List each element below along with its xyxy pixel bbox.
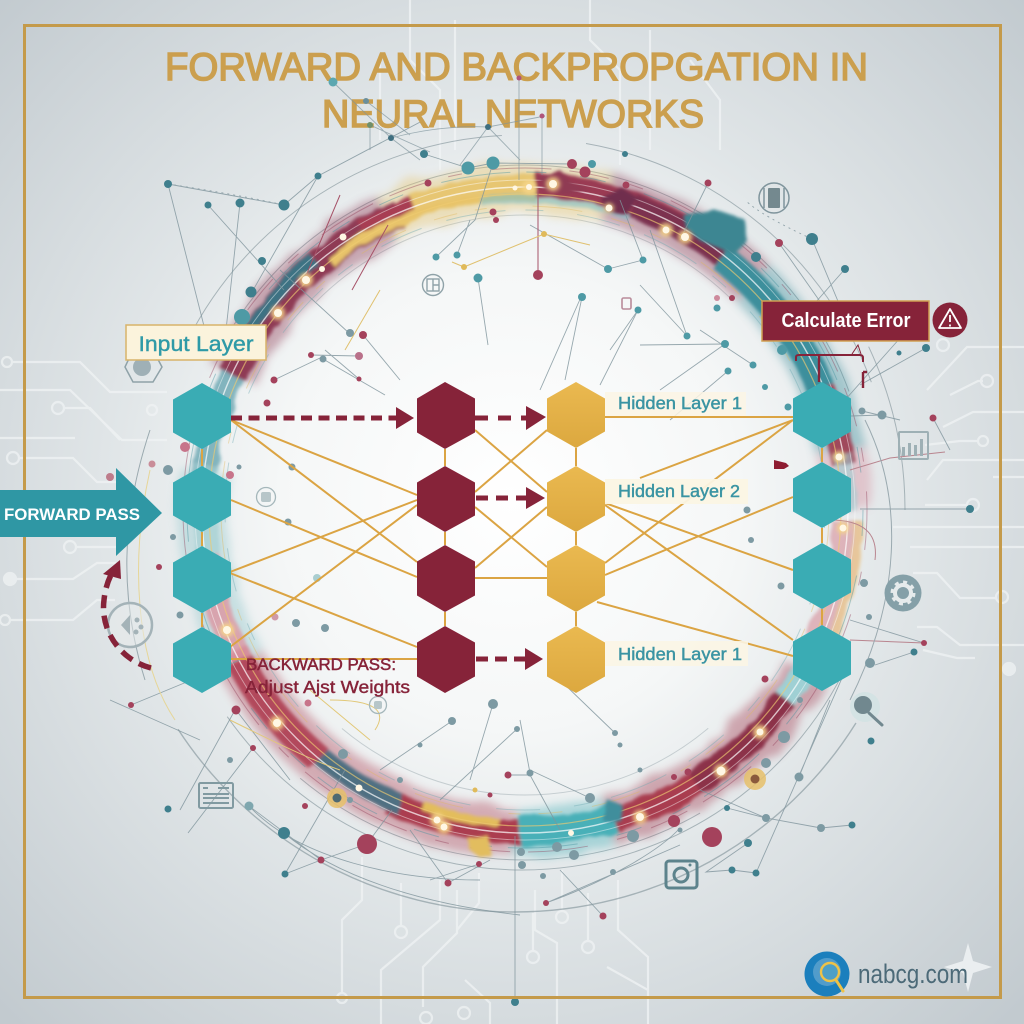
backward pass label (245, 655, 410, 697)
scattered network nodes (106, 150, 974, 1006)
title (165, 46, 868, 136)
dashed arrow: input to hidden top (231, 407, 414, 429)
calculate error label (762, 301, 929, 341)
coloured thin lines (127, 190, 945, 770)
input layer label: Input Layer (138, 333, 254, 356)
ring feather haze (203, 188, 847, 832)
title: NEURAL NETWORKS (322, 93, 704, 136)
label: hidden layer 1 lower (605, 641, 748, 666)
dashed arrow: maroon to gold row 1 (475, 406, 546, 430)
label: hidden layer 2 (605, 479, 748, 504)
outer thin orbit arcs (113, 108, 917, 912)
logo: nabcg.com: nabcg.com (858, 959, 968, 989)
input layer label (126, 325, 266, 360)
title overlay network (328, 76, 545, 180)
icon: small pink square (622, 298, 631, 309)
ring highlights (195, 180, 855, 840)
ring splashes (468, 170, 747, 858)
title: FORWARD AND BACKPROPGATION IN (165, 46, 868, 89)
dashed arrow: maroon to gold row 2 (476, 487, 545, 509)
dashed arrow: maroon to gold row 4 (476, 648, 543, 670)
label: hidden layer 2: Hidden Layer 2 (618, 481, 740, 501)
hidden layer maroon column (417, 382, 475, 693)
icon: warning (932, 302, 968, 338)
icon: magnifier (850, 692, 882, 725)
icon: bar chart (899, 432, 928, 459)
calculate error label: Calculate Error (782, 310, 911, 332)
icon: plug badge (108, 603, 152, 647)
backward pass label: BACKWARD PASS: (246, 655, 396, 674)
label: hidden layer 1: Hidden Layer 1 (618, 393, 742, 413)
forward pass arrow: FORWARD PASS (4, 505, 140, 524)
icon: camera (666, 861, 697, 888)
icon: gear (884, 574, 922, 612)
icon: small circle badges (256, 488, 386, 714)
icon: document card (199, 783, 233, 808)
input layer column (173, 383, 231, 693)
icon: square badge (422, 274, 444, 296)
logo: nabcg.com (804, 943, 992, 996)
label: hidden layer 1 lower: Hidden Layer 1 (618, 644, 742, 664)
curved dashed backward arrow (103, 560, 151, 668)
error feedback connector (796, 345, 867, 388)
label: hidden layer 1 (605, 392, 793, 417)
network connection lines (202, 417, 822, 659)
icon: hexagon node behind input label (125, 350, 162, 382)
backward pass label: Adjust Ajst Weights (245, 677, 410, 697)
forward pass arrow (0, 468, 162, 556)
output layer column (793, 382, 851, 691)
small maroon marker (774, 460, 789, 469)
icon: circular bar badge (759, 183, 789, 213)
connecting thin lines (110, 120, 970, 1002)
ring tangential streaks (183, 168, 867, 852)
ring glowing sparks (220, 177, 849, 836)
hidden layer gold column (547, 382, 605, 693)
ring: colourful brush-stroke circle (191, 176, 859, 844)
